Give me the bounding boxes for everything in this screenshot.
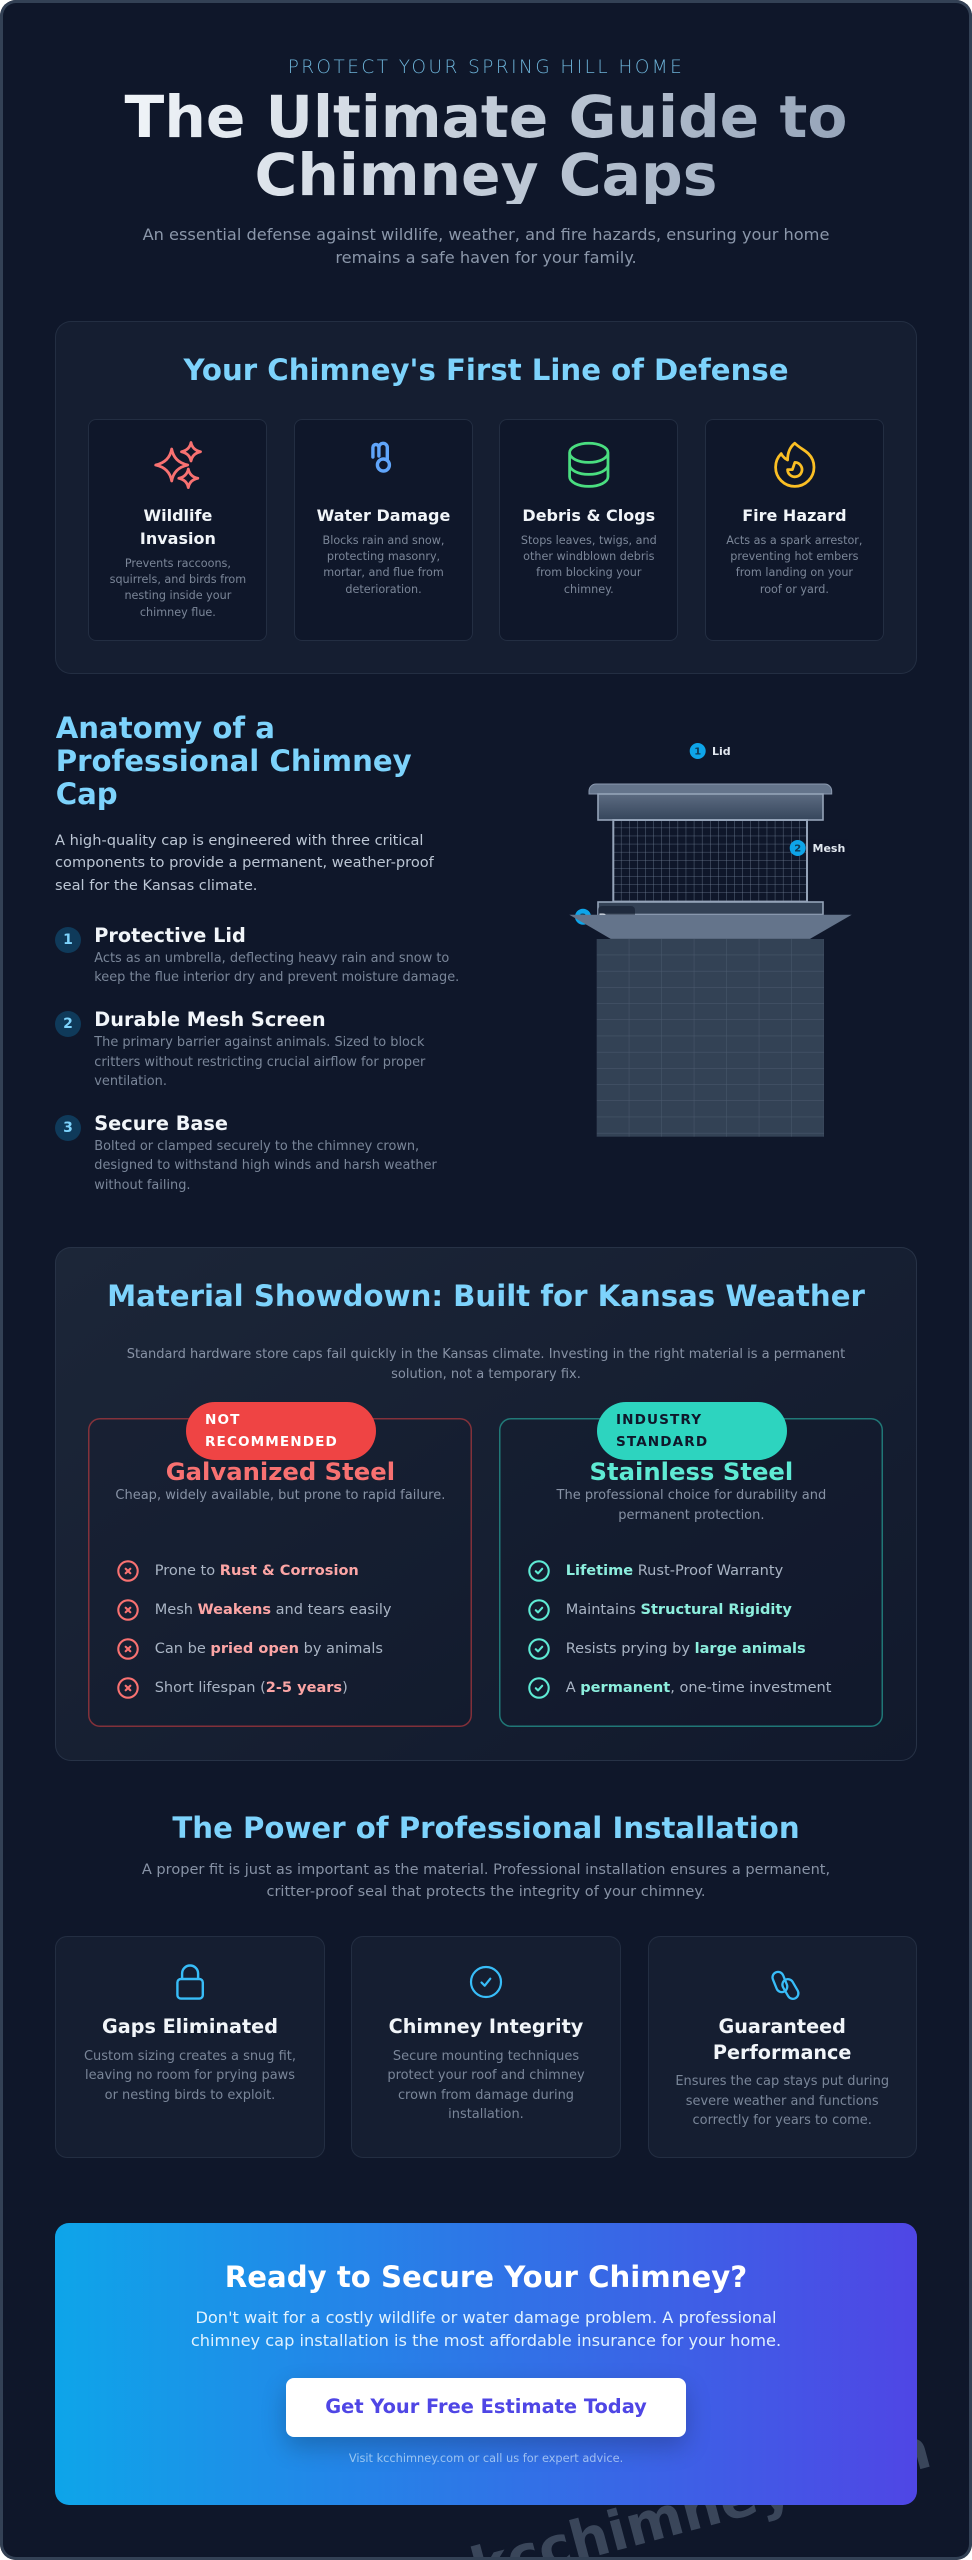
card title: Water Damage — [317, 506, 450, 524]
card title: Debris & Clogs — [522, 506, 655, 524]
card text — [387, 2049, 585, 2122]
component text: designed to withstand high winds and harsh weather — [94, 1158, 437, 1173]
card: galvanized steel — [88, 1418, 472, 1727]
list: benefits — [528, 1560, 832, 1699]
component 2 — [55, 1008, 426, 1089]
label: mesh: Mesh — [812, 842, 845, 855]
component text: ventilation. — [94, 1074, 167, 1089]
drawback 4: Short lifespan (2-5 years) — [155, 1679, 348, 1696]
card title: Fire Hazard — [742, 506, 847, 524]
icon: flame — [774, 442, 816, 488]
card text: severe weather and functions — [686, 2094, 879, 2109]
number 2 — [55, 1011, 81, 1037]
label: base — [575, 906, 635, 926]
card: water damage — [294, 419, 473, 641]
heading: Material Showdown: Built for Kansas Weather — [107, 1279, 865, 1313]
drawback 1 — [117, 1560, 359, 1582]
icon: chain link — [771, 1970, 800, 2000]
card title — [140, 506, 216, 548]
card title: Gaps Eliminated — [102, 2015, 278, 2038]
intro text: A proper fit is just as important as the material. Professional installation ensures a permanent, — [142, 1861, 830, 1878]
card text: from landing on your — [736, 566, 853, 579]
component title: Secure Base — [94, 1112, 228, 1135]
flange — [569, 915, 852, 939]
benefit 1 — [528, 1560, 783, 1582]
card title: Guaranteed — [718, 2015, 846, 2038]
call to action banner — [55, 2223, 917, 2505]
intro text: critter-proof seal that protects the integrity of your chimney. — [266, 1883, 706, 1900]
component text: Acts as an umbrella, deflecting heavy rain and snow to — [94, 951, 449, 966]
card: wildlife invasion — [88, 419, 267, 641]
heading: Professional Chimney — [56, 744, 412, 778]
badge: industry standard: INDUSTRY — [616, 1412, 702, 1428]
header — [124, 57, 847, 267]
label: lid: Lid — [712, 745, 731, 758]
component text: critters without restricting crucial airflow for proper — [94, 1055, 425, 1070]
card text: leaving no room for prying paws — [85, 2068, 295, 2083]
component text — [94, 951, 459, 985]
benefit 2: Maintains Structural Rigidity — [566, 1601, 792, 1618]
eyebrow: PROTECT YOUR SPRING HILL HOME — [288, 57, 684, 78]
component text: Bolted or clamped securely to the chimney crown, — [94, 1139, 419, 1154]
label: base: Base — [598, 912, 628, 924]
label: mesh — [790, 839, 849, 857]
diagram: chimney cap anatomy — [570, 743, 852, 1137]
card text: protect your roof and chimney — [387, 2068, 585, 2083]
component text — [94, 1035, 426, 1089]
number 3 — [55, 1115, 81, 1141]
material title: Galvanized Steel — [166, 1457, 395, 1486]
card title — [648, 2014, 917, 2066]
card text: installation. — [448, 2107, 524, 2122]
heading — [56, 710, 412, 810]
card text: from blocking your — [536, 566, 641, 579]
icon: water gauge — [371, 442, 392, 473]
badge: not recommended — [186, 1402, 376, 1460]
heading: The Power of Professional Installation — [172, 1811, 800, 1845]
drawback 4 — [117, 1677, 348, 1699]
icon: lock — [176, 1964, 204, 2000]
card: stainless steel — [499, 1418, 883, 1727]
card text: crown from damage during — [398, 2088, 574, 2103]
panel: first line of defense — [55, 321, 917, 674]
card text: roof or yard. — [760, 582, 829, 596]
card text — [726, 534, 862, 596]
card text: correctly for years to come. — [693, 2113, 872, 2128]
card: debris and clogs — [499, 419, 678, 641]
benefit 1: Lifetime Rust-Proof Warranty — [566, 1562, 783, 1579]
subtitle — [142, 225, 829, 267]
icon: sparkles — [154, 441, 202, 489]
badge: not recommended: NOT — [205, 1412, 240, 1428]
card text: other windblown debris — [523, 550, 654, 563]
number 3: 3 — [63, 1120, 73, 1136]
badge: not recommended: RECOMMENDED — [205, 1434, 338, 1450]
card text: nesting inside your — [124, 589, 231, 602]
heading: Cap — [56, 776, 118, 810]
card text: squirrels, and birds from — [110, 573, 246, 586]
benefit 4: A permanent, one-time investment — [566, 1679, 831, 1696]
component title: Durable Mesh Screen — [94, 1008, 326, 1031]
intro text: A high-quality cap is engineered with three critical — [55, 832, 423, 849]
intro text: components to provide a permanent, weather-proof — [55, 854, 434, 871]
card text — [84, 2049, 296, 2103]
text: chimney cap installation is the most affordable insurance for your home. — [191, 2331, 781, 2350]
intro text: Standard hardware store caps fail quickly in the Kansas climate. Investing in the right material is a permanent — [127, 1347, 845, 1362]
component text: without failing. — [94, 1178, 190, 1193]
card text: Prevents raccoons, — [125, 557, 231, 570]
card text — [323, 534, 444, 596]
icon: stacked debris — [568, 442, 610, 488]
title: The Ultimate Guide to — [125, 83, 847, 151]
component title: Protective Lid — [94, 924, 246, 947]
benefit 3 — [528, 1638, 806, 1660]
drawback 2: Mesh Weakens and tears easily — [155, 1601, 392, 1618]
text: Don't wait for a costly wildlife or water damage problem. A professional — [195, 2308, 777, 2327]
title: Chimney Caps — [255, 141, 717, 209]
title — [122, 88, 850, 204]
intro text: solution, not a temporary fix. — [391, 1367, 581, 1382]
label: mesh: 2 — [794, 844, 801, 855]
number 1 — [55, 927, 81, 953]
button: Get Your Free Estimate Today — [325, 2395, 647, 2418]
intro text — [127, 1347, 845, 1382]
card text — [648, 2072, 917, 2131]
drawback 3: Can be pried open by animals — [155, 1640, 383, 1657]
card title: Chimney Integrity — [389, 2015, 583, 2038]
section: anatomy text — [55, 710, 459, 1193]
benefit 2 — [528, 1599, 792, 1621]
badge: industry standard — [597, 1402, 787, 1460]
card text: chimney flue. — [140, 606, 216, 618]
list: drawbacks — [117, 1560, 392, 1699]
text — [55, 2307, 917, 2353]
card title: Wildlife — [143, 506, 212, 524]
button — [286, 2378, 686, 2437]
intro text: seal for the Kansas climate. — [55, 877, 257, 894]
icon: check circle — [470, 1966, 502, 1998]
material text: Cheap, widely available, but prone to rapid failure. — [115, 1488, 445, 1503]
drawback 3 — [117, 1638, 383, 1660]
badge: industry standard: STANDARD — [616, 1434, 708, 1450]
card: chimney integrity — [351, 1936, 621, 2158]
label: base: 3 — [580, 912, 587, 923]
card text: Stops leaves, twigs, and — [521, 534, 657, 547]
material text: permanent protection. — [618, 1508, 765, 1523]
component text: The primary barrier against animals. Sized to block — [94, 1035, 424, 1050]
cap lid — [589, 784, 832, 820]
component text: keep the flue interior dry and prevent moisture damage. — [94, 970, 459, 985]
card: guaranteed performance — [648, 1936, 917, 2158]
card text: protecting masonry, — [327, 550, 440, 563]
benefit 3: Resists prying by large animals — [566, 1640, 806, 1657]
card text: chimney. — [564, 582, 614, 596]
card text — [110, 557, 246, 618]
card text: preventing hot embers — [730, 550, 859, 563]
heading: Anatomy of a — [56, 710, 275, 744]
card text — [521, 534, 657, 596]
label: lid: 1 — [694, 747, 701, 758]
material title: Stainless Steel — [590, 1457, 793, 1486]
card title: Performance — [713, 2041, 851, 2064]
panel: material showdown — [55, 1247, 917, 1761]
mesh screen — [613, 820, 807, 902]
card text: Blocks rain and snow, — [323, 534, 444, 547]
card text: or nesting birds to exploit. — [105, 2088, 275, 2103]
label: lid — [690, 743, 731, 759]
card text: Secure mounting techniques — [393, 2049, 579, 2064]
heading: Your Chimney's First Line of Defense — [183, 353, 789, 387]
section header: professional installation — [142, 1811, 830, 1900]
benefit 4 — [528, 1677, 832, 1699]
heading: Ready to Secure Your Chimney? — [225, 2260, 747, 2294]
chimney stack — [597, 939, 824, 1137]
card text: Ensures the cap stays put during — [675, 2074, 889, 2089]
drawback 2 — [117, 1599, 392, 1621]
intro text — [55, 832, 434, 894]
component 1 — [55, 924, 459, 985]
card text: deterioration. — [345, 582, 422, 596]
card: gaps eliminated — [55, 1936, 325, 2158]
footnote: Visit kcchimney.com or call us for expert advice. — [349, 2451, 623, 2465]
drawback 1: Prone to Rust & Corrosion — [155, 1562, 359, 1579]
base band — [598, 902, 823, 914]
card text: Acts as a spark arrestor, — [726, 534, 862, 547]
card: fire hazard — [705, 419, 884, 641]
intro text — [142, 1861, 830, 1900]
card title: Invasion — [140, 528, 216, 548]
material text — [556, 1488, 826, 1523]
material text: The professional choice for durability and — [557, 1488, 826, 1503]
component 3 — [55, 1112, 437, 1193]
component text — [94, 1139, 437, 1193]
card text: mortar, and flue from — [323, 566, 444, 579]
subtitle: An essential defense against wildlife, weather, and fire hazards, ensuring your home — [143, 225, 829, 244]
number 1: 1 — [63, 932, 73, 948]
subtitle: remains a safe haven for your family. — [335, 248, 637, 267]
number 2: 2 — [63, 1016, 73, 1032]
card text: Custom sizing creates a snug fit, — [84, 2049, 296, 2064]
